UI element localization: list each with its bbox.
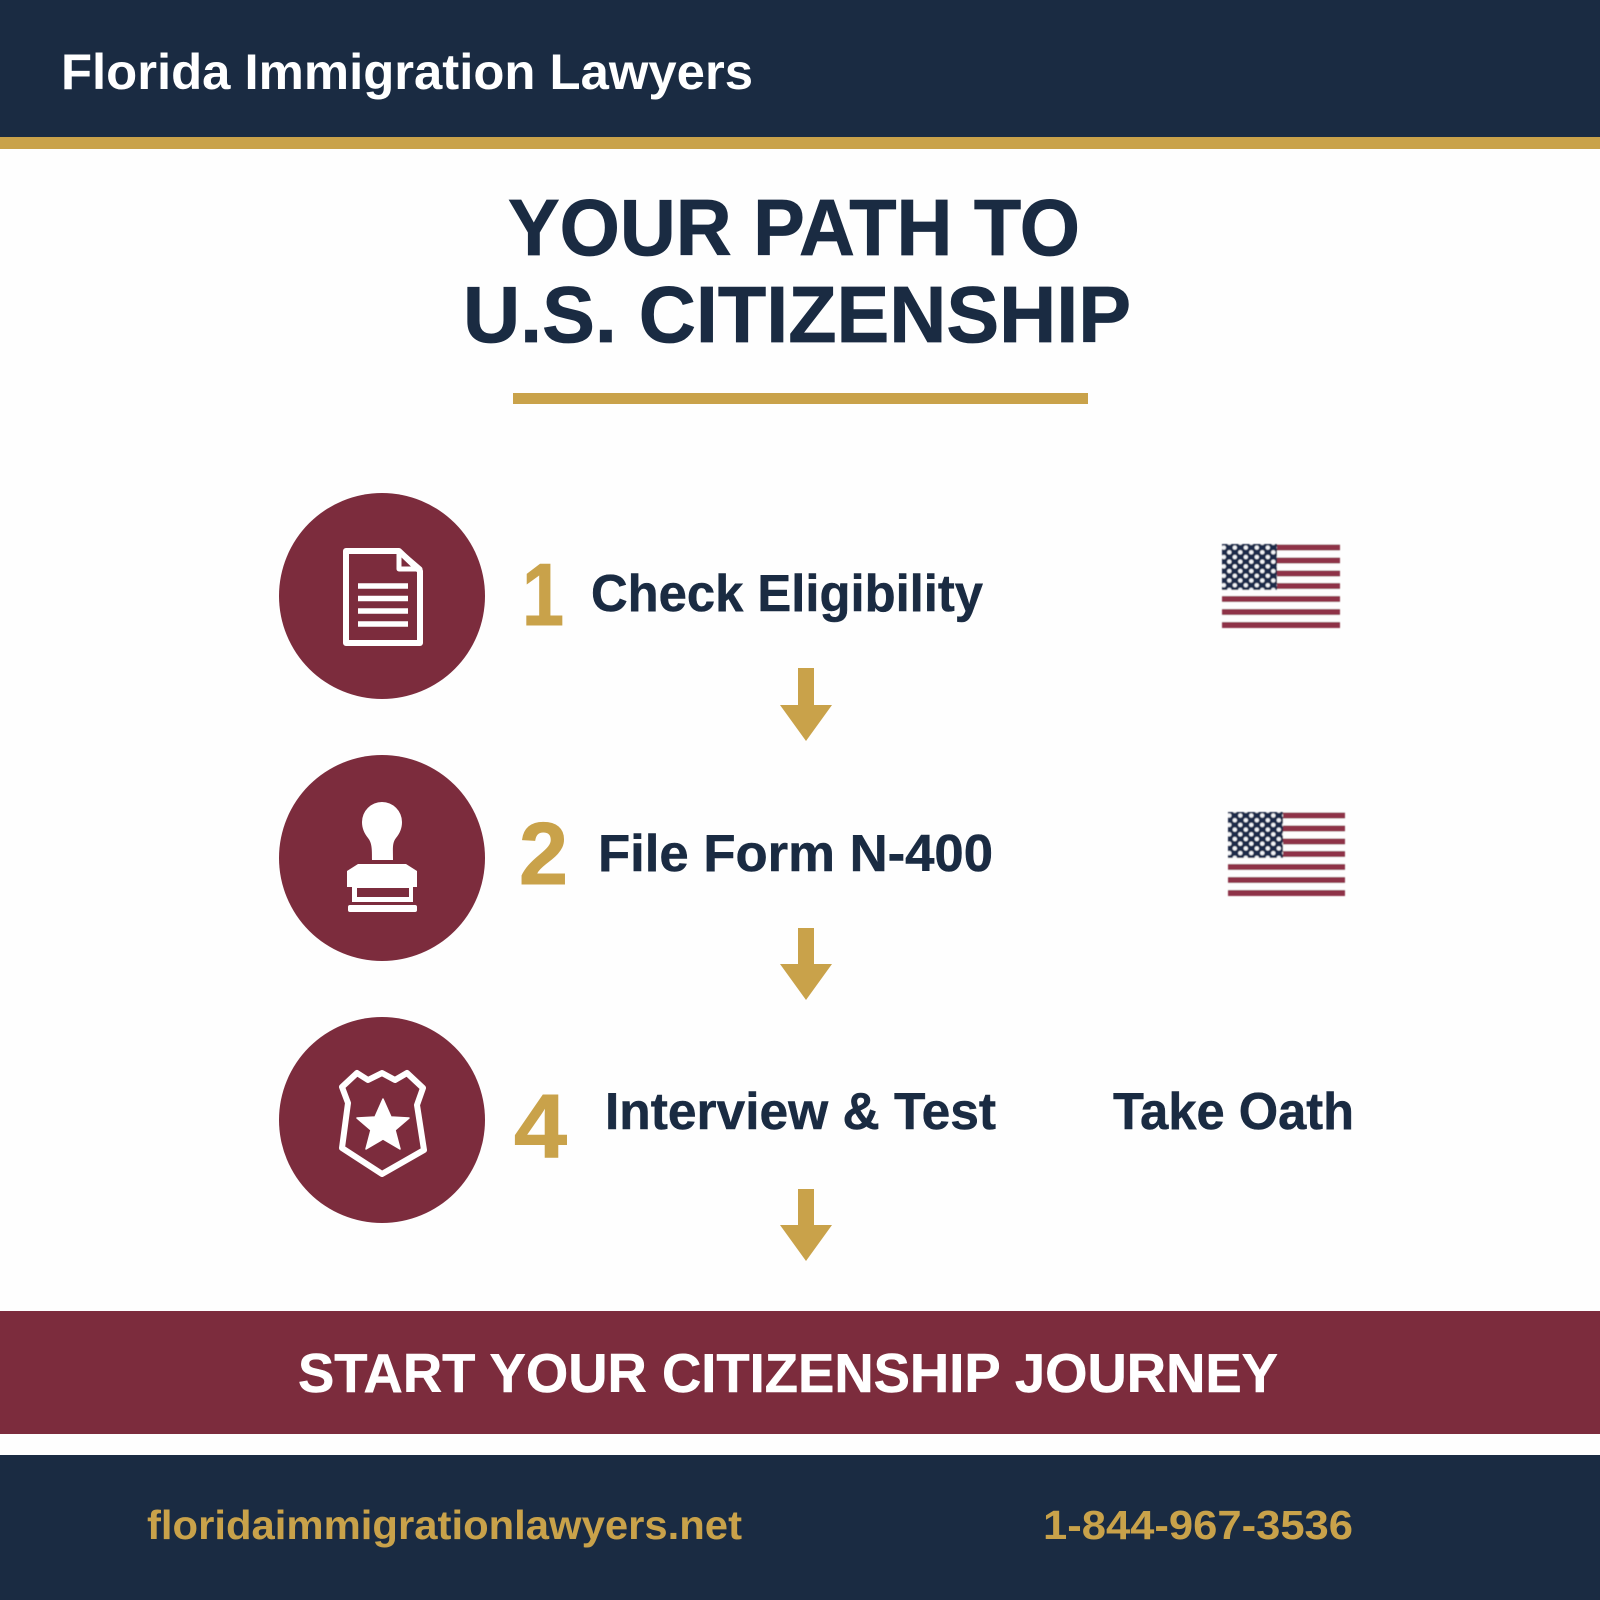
step number 2: 2	[519, 804, 568, 903]
title: YOUR PATH TO	[508, 183, 1080, 272]
arrow 3	[780, 1189, 832, 1261]
icon: police badge	[279, 1017, 485, 1223]
arrow 1	[780, 668, 832, 741]
step number 4: 4	[514, 1077, 567, 1177]
step label: interview and test: Interview & Test	[605, 1083, 996, 1141]
footer phone: 1-844-967-3536	[1043, 1502, 1353, 1548]
header banner	[0, 0, 1600, 149]
step 3: interview and oath	[279, 1017, 1354, 1223]
call to action banner: START YOUR CITIZENSHIP JOURNEY	[298, 1342, 1278, 1404]
icon: american flag	[1222, 544, 1340, 628]
call to action banner	[0, 1311, 1600, 1434]
title	[463, 183, 1131, 359]
step label: take oath: Take Oath	[1113, 1083, 1354, 1141]
icon: rubber stamp	[279, 755, 485, 961]
title underline	[513, 393, 1088, 404]
step label: file form n-400: File Form N-400	[598, 825, 993, 883]
header firm name: Florida Immigration Lawyers	[61, 44, 753, 100]
footer bar	[0, 1455, 1600, 1600]
title: U.S. CITIZENSHIP	[463, 270, 1131, 359]
arrow 2	[780, 928, 832, 1000]
footer website: floridaimmigrationlawyers.net	[147, 1502, 742, 1548]
icon: document	[279, 493, 485, 699]
step label: check eligibility: Check Eligibility	[591, 565, 983, 623]
icon: american flag	[1228, 812, 1345, 896]
step number 1: 1	[522, 545, 564, 644]
step 2: file form n-400	[279, 755, 1345, 961]
step 1: check eligibility	[279, 493, 1340, 699]
